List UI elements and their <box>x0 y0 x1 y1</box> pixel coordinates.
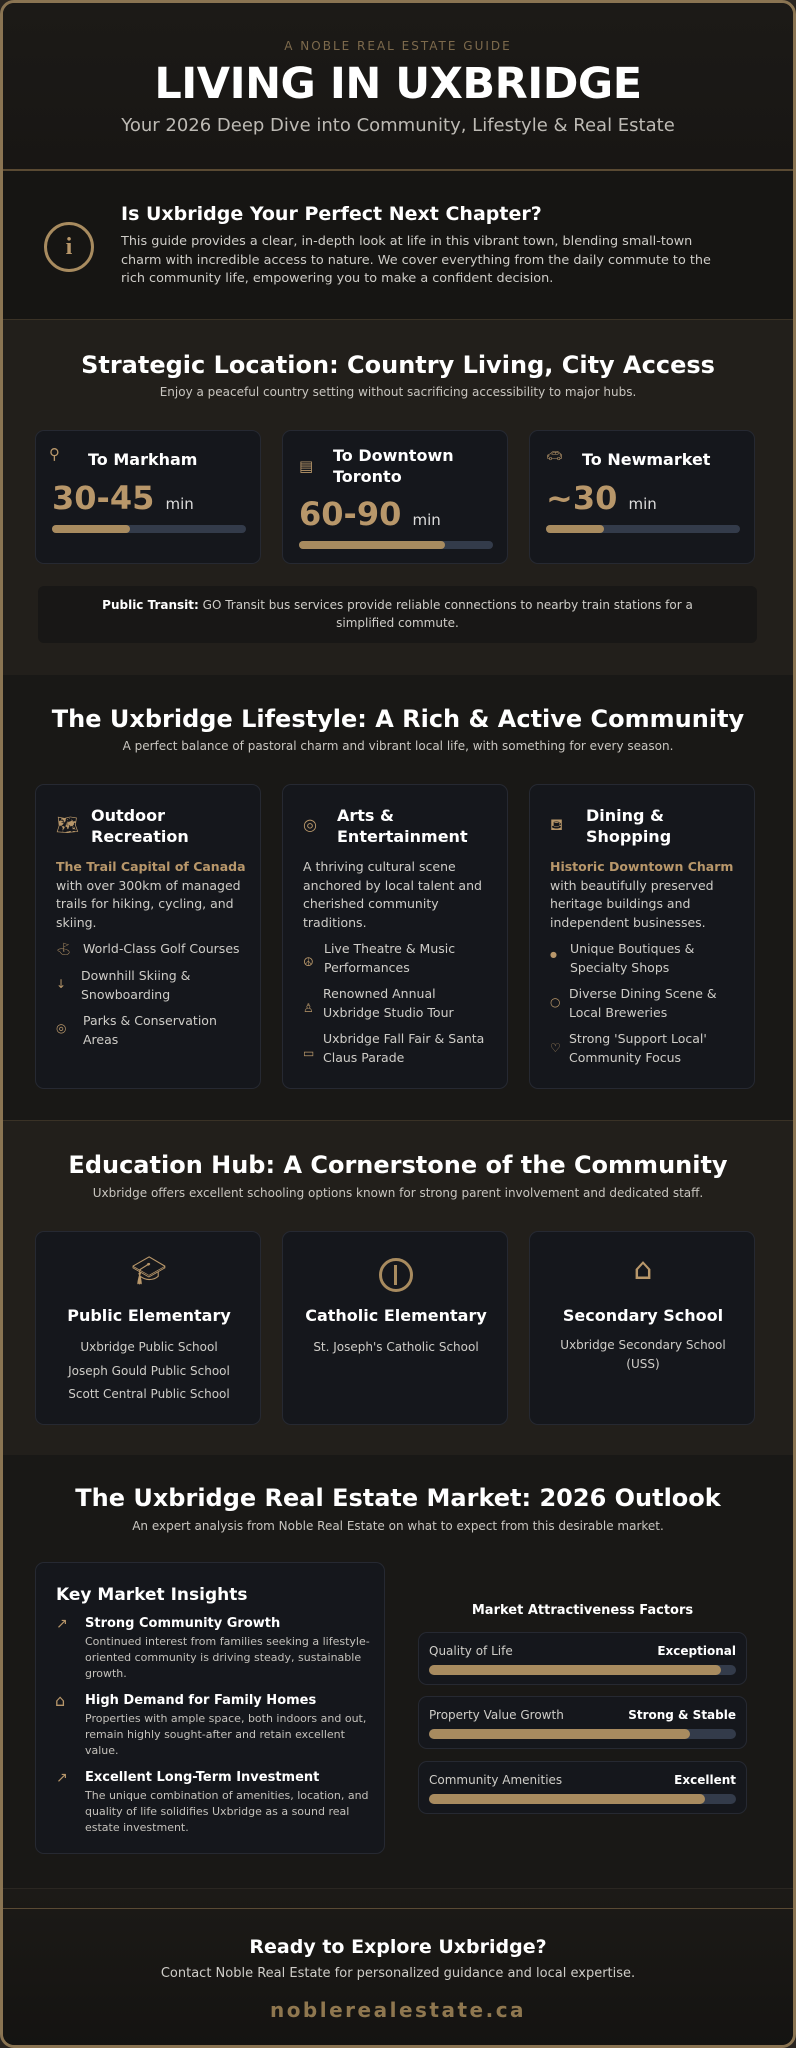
chart: attractiveness factors <box>418 1603 747 1814</box>
card: secondary: Uxbridge Secondary School <box>560 1338 726 1352</box>
panel: lifestyle <box>3 675 793 1120</box>
card: Downtown Toronto: 60-90 min <box>299 495 441 533</box>
card: secondary: (USS) <box>626 1357 660 1371</box>
card: catholic elementary: Catholic Elementary <box>305 1306 487 1325</box>
card: outdoor recreation: Parks & Conservation Areas <box>83 1013 217 1046</box>
footer url: noblerealestate.ca <box>270 1998 526 2022</box>
chart: attractiveness factors: Excellent <box>674 1773 736 1787</box>
card: catholic elementary <box>282 1231 508 1425</box>
insights card: High Demand for Family Homes <box>85 1693 316 1708</box>
icon: info: i <box>66 234 72 260</box>
card: arts <box>282 784 508 1089</box>
card: dining: Shopping <box>586 827 671 846</box>
location subtitle: Enjoy a peaceful country setting without sacrificing accessibility to major hubs. <box>160 385 636 399</box>
card: outdoor recreation: Downhill Skiing & Snowboarding <box>81 968 190 1002</box>
footer text: Contact Noble Real Estate for personalized guidance and local expertise. <box>161 1966 635 1981</box>
insights card: ⌂ <box>55 1691 65 1710</box>
card: secondary: ⌂ <box>633 1252 653 1287</box>
card: outdoor recreation: ⛳︎ <box>56 942 71 956</box>
card: arts: Entertainment <box>337 827 468 846</box>
card: Newmarket: ~30 min <box>546 479 657 517</box>
card: secondary <box>529 1231 755 1425</box>
panel: education <box>3 1120 793 1455</box>
card: outdoor recreation: 🗺︎ <box>56 815 79 836</box>
intro heading: Is Uxbridge Your Perfect Next Chapter? <box>121 203 542 225</box>
header subtitle: Your 2026 Deep Dive into Community, Lifestyle & Real Estate <box>121 115 675 136</box>
lifestyle heading: The Uxbridge Lifestyle: A Rich & Active Community <box>52 705 744 733</box>
card: outdoor recreation <box>35 784 261 1089</box>
intro panel <box>3 171 793 319</box>
insights card: Continued interest from families seeking a lifestyle-oriented community is driving steady, sustainable growth. <box>85 1635 370 1680</box>
insights card: Properties with ample space, both indoors and out, remain highly sought-after and retain excellent value. <box>85 1712 366 1757</box>
insights card: Key Market Insights <box>56 1585 248 1605</box>
card: catholic elementary: St. Joseph's Catholic School <box>313 1340 479 1354</box>
card: Newmarket: 🚗︎ <box>546 449 563 464</box>
header <box>3 3 793 171</box>
card: public elementary: Scott Central Public School <box>68 1387 230 1401</box>
card: public elementary: Public Elementary <box>67 1306 231 1325</box>
card: Markham: To Markham <box>88 450 197 469</box>
market subtitle: An expert analysis from Noble Real Estate on what to expect from this desirable market. <box>132 1519 664 1533</box>
lifestyle subtitle: A perfect balance of pastoral charm and vibrant local life, with something for every season. <box>123 739 673 753</box>
card: arts: ◎ <box>303 815 317 834</box>
icon: info <box>44 222 94 272</box>
card: Markham: 30-45 min <box>52 479 194 517</box>
intro text: This guide provides a clear, in-depth look at life in this vibrant town, blending small-town charm with incredible access to nature. We cover everything from the daily commute to the rich community life, empowering you to make a confident decision. <box>121 234 711 286</box>
card: Downtown Toronto <box>282 430 508 564</box>
insights card: Excellent Long-Term Investment <box>85 1770 319 1785</box>
card: dining: Dining & <box>586 806 664 825</box>
card: secondary: Secondary School <box>563 1306 723 1325</box>
chart: attractiveness factors: Property Value Growth <box>429 1708 564 1722</box>
insights card <box>35 1562 385 1854</box>
card: dining: ● <box>550 950 557 959</box>
card: Downtown Toronto: Toronto <box>333 467 402 486</box>
card: outdoor recreation: Outdoor <box>91 806 165 825</box>
card: public elementary <box>35 1231 261 1425</box>
chart: attractiveness factors: Community Amenities <box>429 1773 562 1787</box>
card: Markham: ⚲ <box>49 445 60 463</box>
chart: attractiveness factors: Quality of Life <box>429 1644 513 1658</box>
card: dining: Unique Boutiques & Specialty Shops <box>570 941 694 974</box>
insights card: The unique combination of amenities, location, and quality of life solidifies Uxbridge as a sound real estate investment. <box>85 1789 369 1834</box>
card: arts: ♙ <box>303 1001 314 1015</box>
card: dining <box>529 784 755 1089</box>
insights card: Strong Community Growth <box>85 1616 280 1631</box>
insights card: ↗ <box>56 1616 68 1632</box>
card: dining: ⛾ <box>550 815 563 834</box>
card: arts: ☮︎ <box>303 955 314 969</box>
location heading: Strategic Location: Country Living, City Access <box>81 351 715 379</box>
transit note <box>38 586 757 643</box>
card: public elementary: 🎓︎ <box>131 1254 167 1287</box>
card: Newmarket <box>529 430 755 564</box>
card: dining: Strong 'Support Local' Community Focus <box>569 1031 707 1064</box>
card: outdoor recreation: ◎ <box>56 1021 66 1035</box>
card: arts: ▭ <box>303 1046 314 1060</box>
footer <box>3 1888 793 2048</box>
card: Downtown Toronto: ▤ <box>299 457 313 475</box>
card: outdoor recreation: World-Class Golf Courses <box>83 941 240 956</box>
transit note: Public Transit: GO Transit bus services provide reliable connections to nearby train stations for a simplified commute. <box>102 598 693 630</box>
panel: market <box>3 1455 793 1888</box>
card: dining: ♡ <box>550 1041 561 1055</box>
card: dining: Historic Downtown Charm with beautifully preserved heritage buildings and independent businesses. <box>550 859 733 930</box>
card: arts: Live Theatre & Music Performances <box>324 941 455 974</box>
header tagline: A NOBLE REAL ESTATE GUIDE <box>284 39 512 53</box>
card: Markham <box>35 430 261 564</box>
card: outdoor recreation: ↓ <box>56 977 66 991</box>
card: public elementary: Joseph Gould Public School <box>68 1364 230 1378</box>
card: Newmarket: To Newmarket <box>582 450 710 469</box>
card: arts: Arts & <box>337 806 394 825</box>
insights card: ↗ <box>56 1770 68 1786</box>
card: dining: Diverse Dining Scene & Local Breweries <box>569 986 717 1020</box>
education subtitle: Uxbridge offers excellent schooling options known for strong parent involvement and dedicated staff. <box>93 1186 703 1200</box>
card: arts: Uxbridge Fall Fair & Santa Claus Parade <box>323 1031 484 1064</box>
market heading: The Uxbridge Real Estate Market: 2026 Outlook <box>75 1484 721 1512</box>
chart: attractiveness factors: Exceptional <box>657 1644 736 1658</box>
card: public elementary: Uxbridge Public School <box>80 1340 218 1354</box>
card: arts: Renowned Annual Uxbridge Studio Tour <box>323 986 454 1020</box>
card: dining: ○ <box>550 995 560 1009</box>
card: Downtown Toronto: To Downtown <box>333 446 454 465</box>
panel: strategic location <box>3 319 793 675</box>
card: outdoor recreation: Recreation <box>91 827 189 846</box>
card: arts: A thriving cultural scene anchored by local talent and cherished community traditions. <box>303 859 482 930</box>
education heading: Education Hub: A Cornerstone of the Community <box>68 1151 728 1179</box>
card: outdoor recreation: The Trail Capital of Canada with over 300km of managed trails for hiking, cycling, and skiing. <box>56 859 246 930</box>
chart: attractiveness factors: Market Attractiveness Factors <box>472 1603 693 1618</box>
chart: attractiveness factors: Strong & Stable <box>628 1708 736 1722</box>
footer heading: Ready to Explore Uxbridge? <box>249 1936 547 1958</box>
main title: LIVING IN UXBRIDGE <box>154 59 642 109</box>
